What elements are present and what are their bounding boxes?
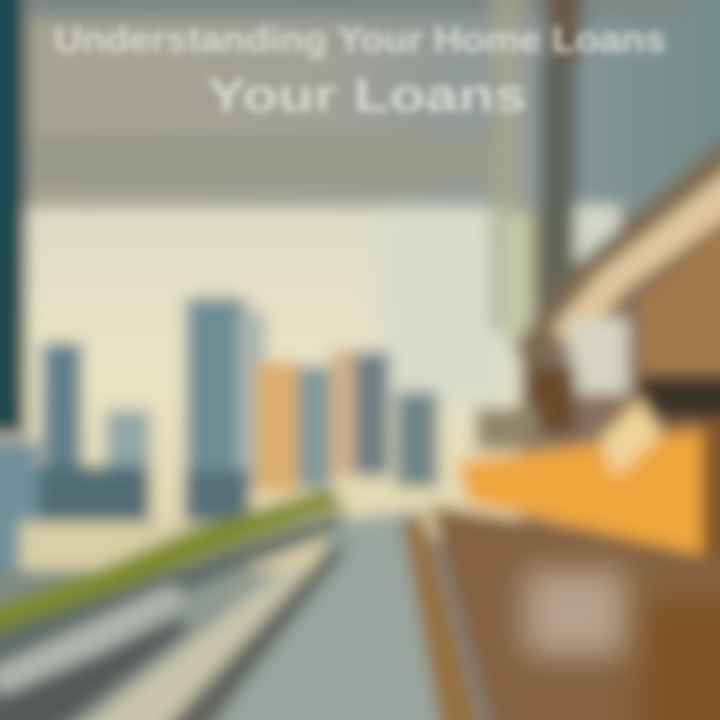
orange counter <box>458 398 720 556</box>
light deck planks <box>0 515 482 720</box>
wooden house roof <box>476 125 720 450</box>
water and ground glow <box>20 522 330 570</box>
title <box>54 19 666 121</box>
dark strip under hedge <box>0 510 345 680</box>
city skyline <box>0 298 438 570</box>
central pillars <box>490 0 620 340</box>
green hedge <box>0 488 345 638</box>
walkway <box>210 510 450 720</box>
left dark column <box>0 0 26 435</box>
title line 2: Your Loans <box>207 69 527 121</box>
title line 1: Understanding Your Home Loans <box>54 19 666 60</box>
wood floor right <box>430 505 720 720</box>
